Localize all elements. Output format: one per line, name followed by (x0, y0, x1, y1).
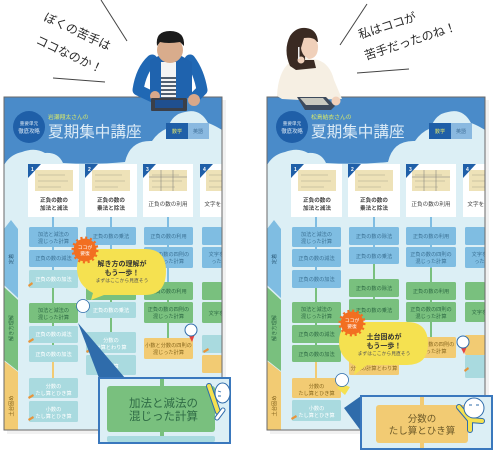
left side tabs: 解き方理解 (7, 315, 15, 341)
accent lines: boy (53, 0, 127, 82)
left column boxes: 混じった計算 (153, 257, 184, 265)
panel: left curriculum (4, 97, 244, 430)
left mini mascot 1 (75, 300, 90, 312)
right column boxes: 混じった計算 (415, 257, 447, 265)
left speech bubble: もう一歩！ (105, 268, 139, 277)
right student name: 松島結衣さんの (311, 113, 352, 121)
right connectors (316, 217, 431, 378)
left panel orange pins (28, 282, 209, 421)
left side tabs: 定着 (7, 254, 15, 264)
right column boxes: 混じった計算 (301, 237, 332, 245)
left header background (4, 97, 222, 165)
right burst badge: ココが (345, 317, 359, 324)
right speech bubble: 土台固めが (366, 332, 402, 341)
left callout cone (78, 323, 125, 378)
right big mascot (459, 398, 484, 430)
left student name: 岩瀬翔太さんの (48, 113, 89, 121)
right mini mascot 1 (336, 374, 350, 395)
right burst badge (340, 312, 364, 334)
right column boxes: 正負の数の除法 (356, 284, 393, 292)
right side tabs: 定着 (270, 254, 278, 264)
right column boxes: 小数の (309, 404, 324, 412)
left column boxes (29, 227, 230, 422)
right column boxes: 正負の数の利用 (413, 232, 449, 240)
left cards: 4 (203, 167, 206, 173)
left column boxes: 加法と減法の (38, 230, 69, 238)
left mini mascot 2 (185, 324, 197, 342)
speech text: boy: ぼくの苦手は (42, 10, 113, 53)
right column boxes: 正負の数の利用 (413, 287, 449, 295)
right title: 夏期集中講座 (311, 123, 405, 141)
left column boxes: 計算とわり算 (95, 343, 127, 351)
left burst badge: 要復 (80, 250, 90, 257)
right column boxes (292, 227, 493, 421)
left column boxes: 加法と減法の (38, 306, 69, 314)
right column boxes: 加法と減法の (301, 305, 332, 313)
right column boxes: 混じった計算 (301, 312, 332, 320)
left cards: 正負の数の (97, 196, 125, 204)
right side tabs: 土台固め (270, 396, 278, 416)
left magnifier (99, 378, 230, 443)
right cards: 正負の数の (303, 196, 331, 204)
right tabs: 英語 (456, 128, 466, 135)
left column boxes: 混じった計算 (38, 237, 69, 245)
right column boxes: 正負の数の除法 (356, 232, 393, 240)
left column boxes: 分数の (46, 382, 61, 390)
right column boxes: 正負の数の乗法 (356, 252, 393, 260)
right column boxes: 分数の計算とわり算 (351, 364, 397, 372)
left tabs (166, 123, 209, 139)
left column boxes: 文字を使 (209, 250, 230, 258)
right panel: curriculum (267, 97, 500, 430)
right speech bubble: もう一歩！ (367, 341, 401, 350)
left side tabs: 土台固め (7, 396, 15, 416)
right column boxes: 小数と分数の四則の (408, 340, 454, 348)
right tabs: 数学 (435, 128, 445, 135)
left cards: 1 (31, 167, 34, 173)
left column boxes: 混じった計算 (153, 348, 184, 356)
right column boxes: った式 (474, 257, 491, 265)
left column boxes: 正負の数の減法 (35, 330, 72, 338)
speech text: boy (34, 10, 113, 76)
right column boxes: 加法と減法の (301, 230, 332, 238)
right column boxes: たし算とひき算 (298, 411, 335, 419)
right badge (276, 111, 308, 143)
girl photo (277, 28, 342, 110)
right column boxes: 正負の数の四則の (410, 250, 452, 258)
left column boxes: 正負の数の四則の (148, 250, 189, 258)
right speech bubble (339, 322, 428, 375)
left cards: 2 (88, 167, 91, 173)
right column boxes: 正負の数の加法 (298, 350, 335, 358)
left speech bubble: 解き方の理解が (98, 259, 146, 268)
right burst badge: 要復 (347, 323, 357, 330)
right column boxes: 正負の数の加法 (298, 275, 335, 283)
left column boxes: 混じった計算 (38, 313, 69, 321)
left burst badge (74, 238, 96, 262)
left column boxes: 正負の数の利用 (150, 232, 187, 240)
left badge (13, 111, 45, 143)
magnified label: 加法と減法の (129, 396, 198, 410)
right magnifier (361, 396, 492, 449)
left panel border (4, 97, 222, 430)
left column boxes: 正負の数の四則の (148, 305, 189, 313)
right column boxes: 混じった計算 (415, 312, 447, 320)
left speech bubble: まずはここから見直そう (96, 277, 148, 284)
right column boxes: 正負の数の減法 (298, 254, 335, 262)
right cards: 乗法と除法 (360, 204, 388, 212)
left badge: 重要単元 (20, 120, 39, 127)
left column boxes: 正負の数の利用 (150, 287, 187, 295)
right cards: 加法と減法 (303, 204, 331, 212)
right column boxes: 文字を使 (472, 308, 493, 316)
right badge: 重要単元 (283, 120, 302, 127)
right badge: 徹底攻略 (281, 127, 303, 135)
right column boxes: 正負の数の乗法 (356, 306, 393, 314)
right cards: 1 (294, 167, 297, 173)
right callout cone (344, 396, 361, 431)
left title: 夏期集中講座 (48, 123, 142, 141)
left column boxes: 分数の (103, 336, 119, 344)
right column boxes: 文字を使 (472, 250, 493, 258)
left burst badge: ココが (78, 244, 92, 251)
speech text: girl: 苦手だったのね！ (363, 20, 458, 63)
left column boxes: 文字を使 (209, 309, 230, 317)
left cards: 3 (146, 167, 149, 173)
left column boxes: 混じった計算 (153, 312, 184, 320)
right panel shadow (270, 100, 489, 434)
right column boxes: たし算とひき算 (298, 389, 335, 397)
left column boxes: 正負の数の加法 (35, 350, 72, 358)
left tabs: 数学 (172, 128, 182, 135)
right cards: 2 (351, 167, 354, 173)
left panel shadow (7, 100, 226, 434)
left column boxes: 正負の数の乗法 (93, 232, 130, 240)
left column boxes: 小数の (46, 405, 61, 413)
boy photo (138, 31, 202, 111)
right column boxes: 正負の数の減法 (298, 330, 335, 338)
right cards: 4 (466, 167, 469, 173)
left cards: 加法と減法 (40, 204, 68, 212)
left cards: 文字を使った式 (204, 200, 244, 208)
left cards: 正負の数の利用 (148, 200, 188, 208)
left column boxes: った式 (211, 257, 228, 265)
left speech bubble (77, 249, 166, 300)
left cards: 乗法と除法 (97, 204, 125, 212)
right mini mascot 2 (457, 336, 469, 354)
right speech bubble: まずはここから見直そう (358, 350, 410, 357)
left column boxes: 正負の数の乗法 (93, 306, 130, 314)
left big mascot (209, 383, 230, 418)
right side tabs (267, 220, 281, 430)
left tabs: 英語 (193, 128, 203, 135)
left column boxes: たし算とひき算 (35, 412, 72, 420)
left column boxes: 正負の数の減法 (35, 254, 72, 262)
right column boxes: 正負の数の四則の (410, 305, 452, 313)
accent lines: girl (340, 4, 409, 73)
left cards: 正負の数の (40, 196, 68, 204)
right tabs (429, 123, 472, 139)
right panel border (267, 97, 485, 430)
right side tabs: 解き方理解 (270, 315, 278, 341)
right column boxes: 混じった計算 (415, 347, 447, 355)
left badge: 徹底攻略 (18, 127, 40, 135)
left column boxes: たし算とひき算 (35, 389, 72, 397)
left cards (28, 164, 222, 217)
left side tabs (4, 220, 18, 430)
right column boxes: 分数の (309, 382, 324, 390)
speech text: boy: ココなのか！ (34, 33, 105, 76)
right cards: 正負の数の利用 (411, 200, 451, 208)
right cards: 正負の数の (360, 196, 388, 204)
speech text: girl: 私はココが (356, 9, 418, 42)
magnified label: たし算とひき算 (389, 425, 455, 437)
right header background (267, 97, 485, 165)
left column boxes: 小数と分数の四則の (145, 341, 192, 349)
right cards: 3 (409, 167, 412, 173)
right panel orange pins (291, 367, 469, 420)
left connectors (53, 217, 168, 378)
magnified label: 分数の (408, 413, 436, 425)
right cards (291, 164, 500, 217)
magnified label: 混じった計算 (129, 409, 198, 423)
left column boxes: かけ算 (103, 362, 119, 370)
left column boxes: 正負の数の加法 (35, 275, 72, 283)
